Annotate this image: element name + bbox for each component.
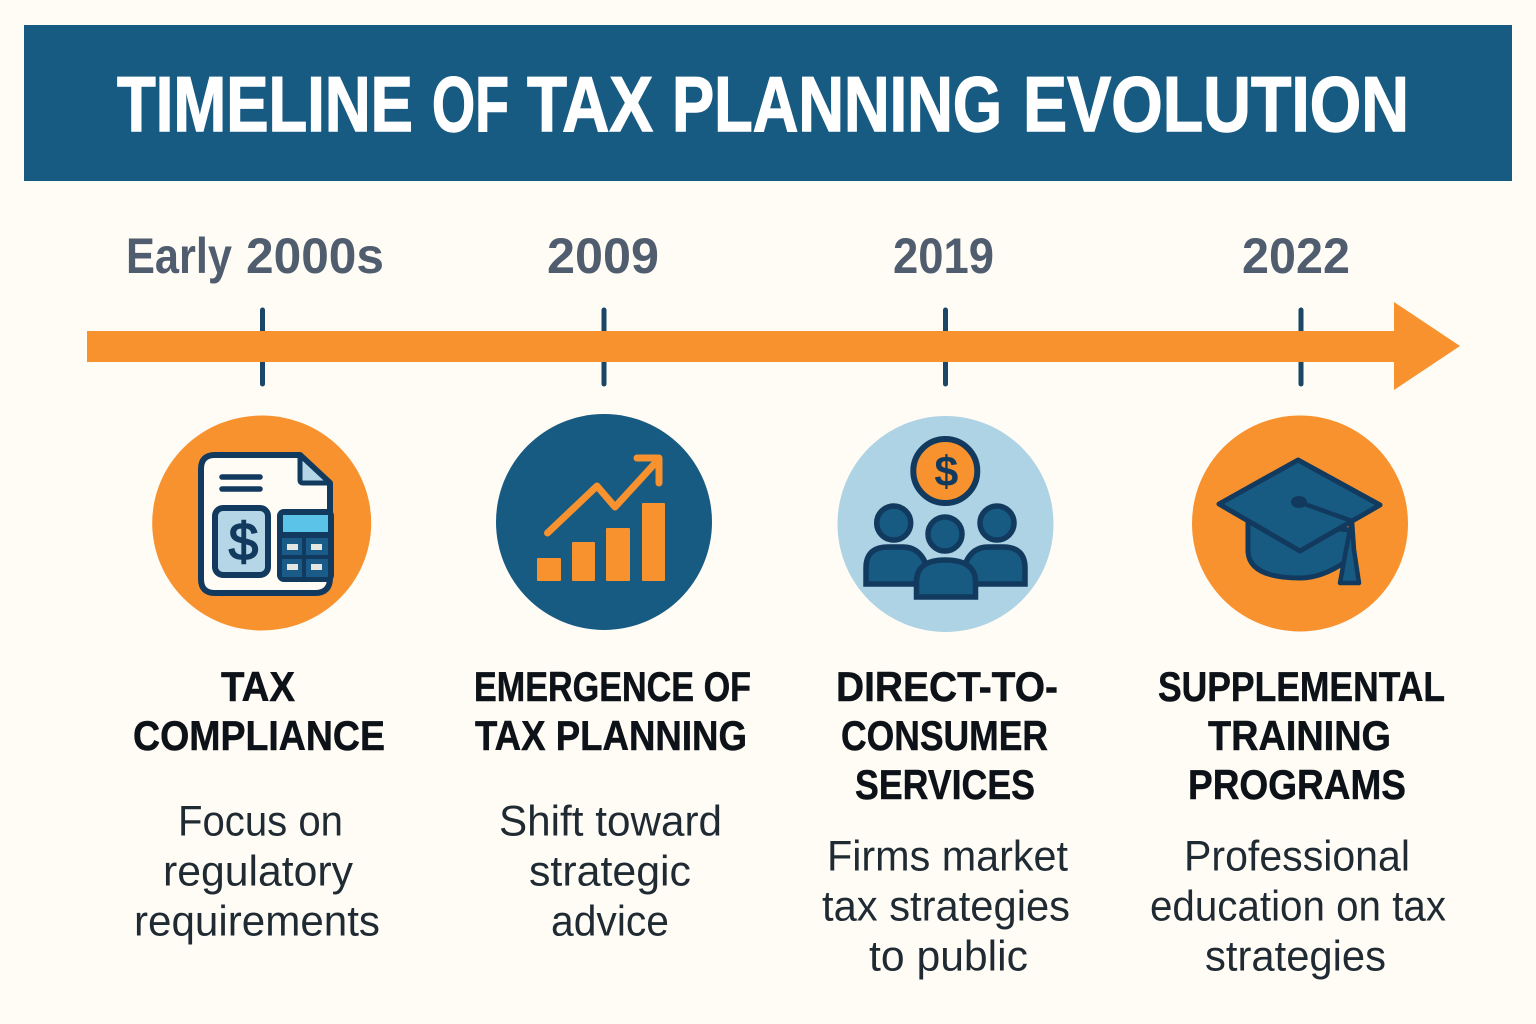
heading: Tax Compliance: TAX [221,663,295,710]
heading: Direct-to-Consumer Services: DIRECT-TO- [836,663,1058,710]
date: Early 2000s [126,228,384,284]
panel: Early 2000s tax compliance [126,228,385,946]
heading: Supplemental Training Programs [1158,663,1445,808]
icon: rising bar chart with arrow [496,414,712,630]
title: TAX [527,60,653,148]
description: Supplemental Training Programs: Professional [1184,832,1410,880]
description: Direct-to-Consumer Services: to public [869,932,1028,980]
description: Supplemental Training Programs: strategies [1205,932,1386,980]
timeline arrow [87,302,1460,390]
title: EVOLUTION [1023,60,1409,148]
heading: Tax Compliance: COMPLIANCE [133,712,385,759]
icon: graduation cap [1192,416,1408,632]
panel: 2019 direct-to-consumer services [822,228,1070,980]
heading: Direct-to-Consumer Services: CONSUMER [841,712,1048,759]
panel: 2009 emergence of tax planning [474,228,751,946]
description: Emergence of Tax Planning: advice [551,898,669,946]
date: 2009: 2009 [547,228,659,284]
date: Early 2000s: Early [126,228,232,284]
heading: Emergence of Tax Planning: EMERGENCE OF [474,663,751,710]
description: Supplemental Training Programs: education on tax [1150,882,1446,930]
date: 2019: 2019 [893,228,994,284]
date: 2022: 2022 [1242,228,1350,284]
date: Early 2000s: 2000s [246,228,384,284]
icon: people and dollar coin [838,416,1054,632]
description: Tax Compliance: Focus on [178,798,343,846]
heading: Emergence of Tax Planning: TAX PLANNING [475,712,747,759]
title: PLANNING [672,60,1002,148]
title banner [24,25,1512,181]
icon: tax document and calculator [152,416,371,630]
heading: Emergence of Tax Planning [474,663,751,759]
heading: Direct-to-Consumer Services: SERVICES [855,761,1035,808]
panel: 2022 supplemental training programs [1150,228,1446,980]
description: Emergence of Tax Planning: Shift toward [499,798,722,846]
title: OF [432,60,509,148]
description: Tax Compliance: regulatory [163,848,353,896]
heading: Supplemental Training Programs: TRAINING [1208,712,1391,759]
title: TIMELINE [117,60,413,148]
description: Supplemental Training Programs [1150,832,1446,980]
heading: Supplemental Training Programs: PROGRAMS [1188,761,1406,808]
heading: Tax Compliance [133,663,385,759]
description: Emergence of Tax Planning [499,798,722,946]
heading: Supplemental Training Programs: SUPPLEMENTAL [1158,663,1445,710]
description: Tax Compliance: requirements [134,898,380,946]
icon: people and dollar coin: $ [934,448,958,496]
description: Direct-to-Consumer Services [822,832,1070,980]
description: Emergence of Tax Planning: strategic [529,848,691,896]
heading: Direct-to-Consumer Services [836,663,1058,808]
description: Tax Compliance [134,798,380,946]
description: Direct-to-Consumer Services: tax strategies [822,882,1070,930]
title [117,60,1409,148]
description: Direct-to-Consumer Services: Firms market [827,832,1068,880]
icon: tax document and calculator: $ [229,513,258,572]
